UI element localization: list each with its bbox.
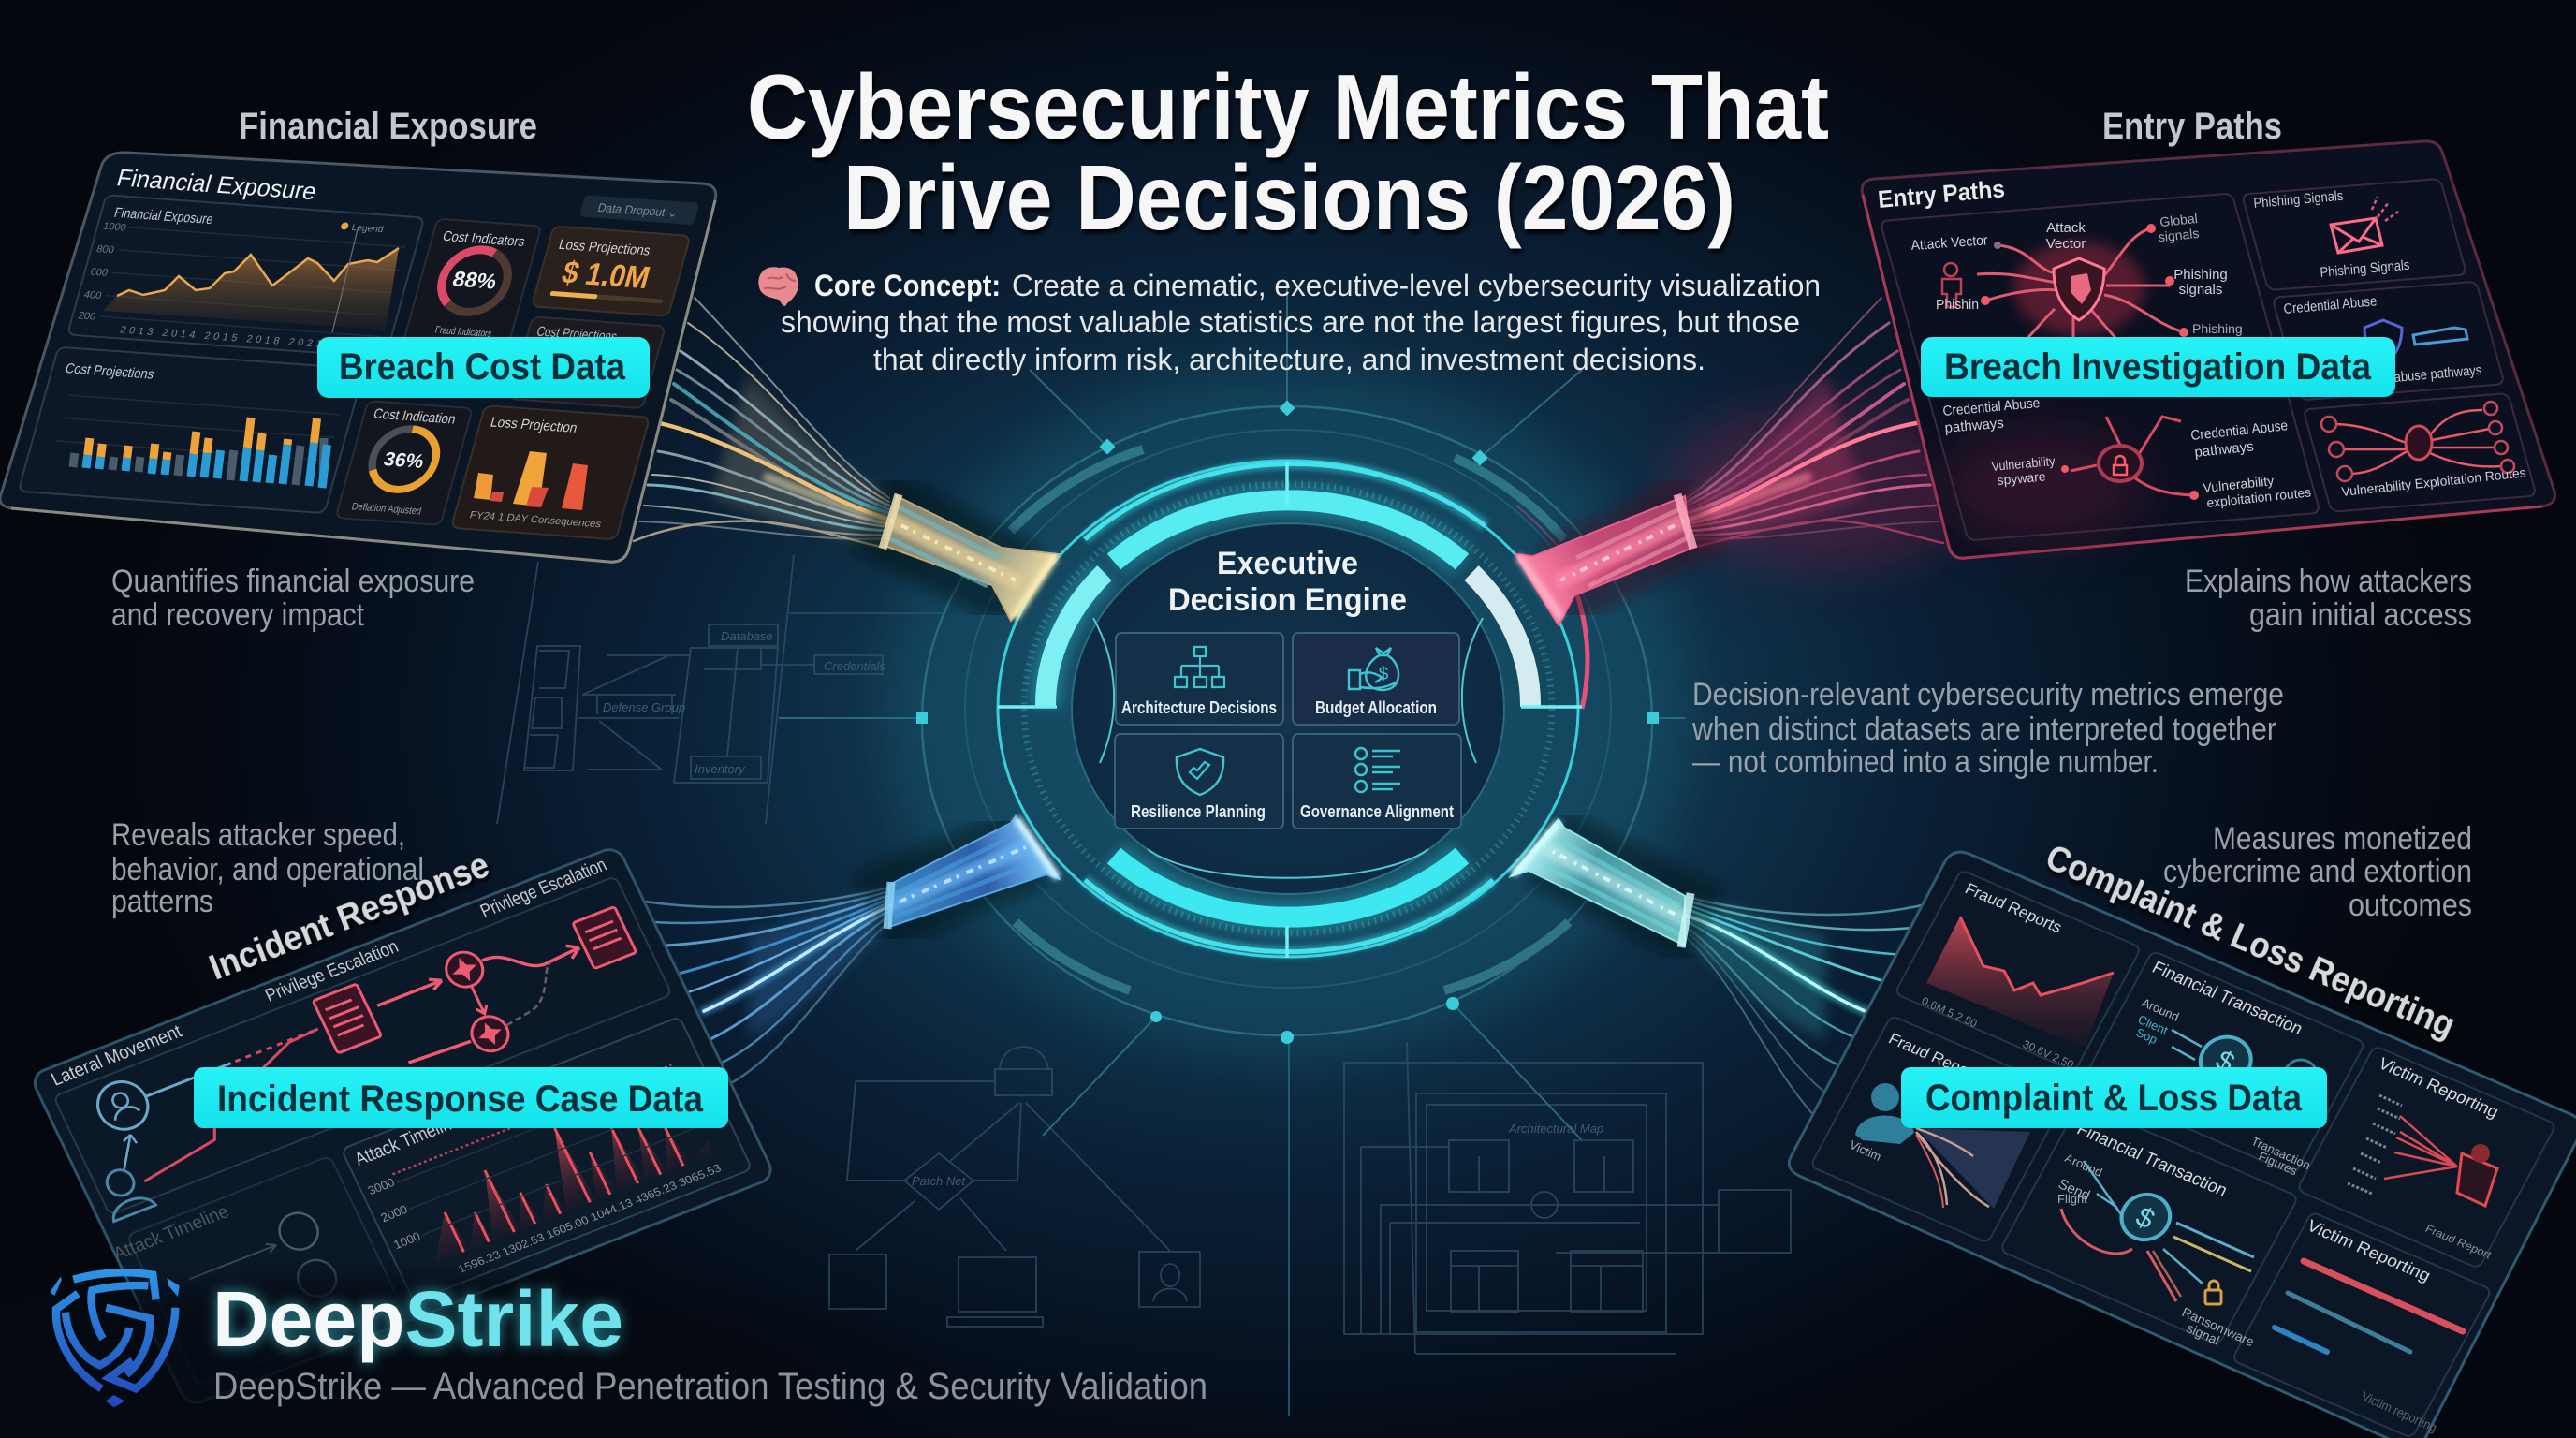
panel: financial exposure dashboard: 600: [89, 267, 110, 279]
lower attack path diagram: Credential Abuse: [2190, 418, 2289, 444]
panel: complaint and loss dashboard: Victim Reporting: [2304, 1216, 2434, 1285]
bottom network wireframe: [829, 1047, 1200, 1327]
data fibers: financial exposure: [634, 298, 889, 548]
architecture wireframe: Architectural Map: [1508, 1122, 1603, 1136]
fraud area chart: [1920, 917, 2114, 1071]
section heading: incident response: Incident Response: [204, 845, 494, 988]
icon: deepstrike shield: [50, 1272, 180, 1407]
credential abuse card: [2283, 293, 2482, 386]
hub rings: [922, 406, 1652, 1035]
data fibers: incident response: [645, 885, 889, 1083]
transaction flow bottom: signal: [2185, 1320, 2222, 1348]
core concept text: that directly inform risk, architecture, and investment decisions.: [873, 343, 1705, 376]
panel: incident response diagram: 2000: [378, 1202, 410, 1225]
caption: complaint and loss: Measures monetized: [2213, 821, 2472, 857]
panel: complaint and loss dashboard: Victim Reporting: [2376, 1054, 2502, 1122]
caption: entry paths: gain initial access: [2249, 597, 2472, 633]
lower attack path diagram: spyware: [1997, 468, 2046, 488]
panel: incident response diagram: Attack Timeline: [352, 1111, 463, 1170]
panel: complaint and loss dashboard: $: [2211, 1045, 2240, 1078]
panel: entry paths diagram: [1862, 141, 2555, 558]
left blueprint wireframe: [497, 555, 944, 824]
panel: financial exposure dashboard: $ 1.0M: [558, 256, 653, 296]
panel: financial exposure dashboard: [0, 153, 716, 562]
card: budget allocation: $: [1379, 665, 1389, 684]
caption: financial exposure: Quantifies financial exposure: [111, 564, 475, 599]
card: budget allocation: Budget Allocation: [1315, 698, 1437, 717]
connector pipe: entry paths: [1515, 494, 1705, 625]
panel: financial exposure dashboard: Fraud Indicators: [433, 325, 493, 340]
callout: complaint and loss data: Complaint & Loss Data: [1925, 1078, 2303, 1119]
panel: financial exposure dashboard: Cost Projections: [64, 360, 155, 383]
phishing signals card: Phishing Signals: [2253, 188, 2344, 212]
left blueprint wireframe: Database: [721, 629, 773, 643]
panel: financial exposure dashboard: Deflation Adjusted: [350, 501, 423, 517]
vulnerability routes card: [2321, 402, 2526, 499]
panel: incident response diagram: 1596.23 1302.53 1605.00 1044.13 4365.23 3065.53: [456, 1161, 724, 1276]
panel: complaint and loss dashboard: Fraud Report: [2423, 1222, 2495, 1262]
caption: interpretation note: — not combined into a single number.: [1692, 744, 2159, 780]
panel: incident response diagram: Lateral Movement: [48, 1021, 185, 1090]
title: Cybersecurity Metrics That: [747, 55, 1829, 158]
transaction flow top: Transaction: [2249, 1134, 2312, 1172]
attack vector hub: signals: [2158, 226, 2200, 244]
caption: interpretation note: when distinct datasets are interpreted together: [1691, 712, 2276, 747]
left blueprint wireframe: Credentials: [824, 659, 886, 673]
logo backdrop: [0, 1259, 973, 1438]
caption: interpretation note: [1691, 677, 2284, 780]
panel: financial exposure dashboard: 2013 2014 2015 2018 2021 2024: [119, 325, 365, 353]
caption: incident response: Reveals attacker speed,: [111, 817, 405, 853]
card: architecture decisions: [1116, 633, 1283, 725]
heading inside panel: Entry Paths: [1877, 174, 2006, 213]
panel: incident response diagram: Attack Timeline: [110, 1201, 232, 1265]
victim flow: Victim: [1848, 1137, 1883, 1164]
caption: financial exposure: [111, 564, 475, 633]
panel: incident response diagram: [29, 845, 775, 1407]
panel: financial exposure dashboard: 400: [82, 289, 103, 301]
caption: incident response: patterns: [111, 884, 213, 919]
lower attack path diagram: Vulnerability: [2203, 473, 2275, 495]
panel: financial exposure dashboard: Legend: [350, 223, 385, 235]
card: budget allocation: [1293, 633, 1459, 725]
fraud area chart: 30.6V 2.50: [2021, 1037, 2076, 1071]
caption: complaint and loss: [2163, 821, 2472, 923]
section heading: complaint and loss reporting: Complaint & Loss Reporting: [2040, 838, 2461, 1046]
victim reporting bars: Victim reporting: [2360, 1388, 2439, 1435]
architecture wireframe: [1344, 1042, 1791, 1354]
attack vector hub: Phishing: [2174, 267, 2228, 283]
callout: breach investigation data: [1921, 337, 2395, 397]
caption: interpretation note: Decision-relevant cybersecurity metrics emerge: [1692, 677, 2284, 712]
caption: incident response: behavior, and operational: [111, 852, 424, 888]
panel: financial exposure dashboard: Cost Indicators: [441, 228, 527, 250]
transaction flow bottom: Flight: [2057, 1192, 2087, 1206]
attack vector hub: Global: [2159, 211, 2198, 229]
lower attack path diagram: Vulnerability: [1991, 453, 2056, 474]
attack vector hub: Phishing: [2192, 321, 2243, 336]
victim reporting fan: [2348, 1095, 2497, 1206]
attack vector hub: Attack Vector: [1910, 232, 1988, 254]
panel: financial exposure dashboard: Loss Projections: [557, 237, 652, 259]
logo wordmark: DeepStrike: [212, 1275, 623, 1363]
transaction flow bottom: Ransomware: [2180, 1304, 2257, 1349]
transaction flow bottom: Around: [2063, 1151, 2104, 1180]
core concept text: Create a cinematic, executive-level cybersecurity visualization: [1012, 269, 1821, 302]
maroon glow around entry fibers: [1666, 403, 1984, 571]
data fibers: complaint and loss: [1687, 896, 1930, 1119]
lower attack path diagram: [1942, 395, 2312, 510]
panel: incident response diagram: 1000: [391, 1229, 423, 1252]
victim flow: [1848, 1083, 2030, 1209]
lower attack path diagram: pathways: [2194, 438, 2254, 461]
panel: incident response diagram: 3000: [366, 1175, 397, 1197]
panel: financial exposure dashboard: Data Dropout ⌄: [596, 200, 680, 220]
line chart: financial exposure: [103, 229, 399, 332]
panel: complaint and loss dashboard: Financial Transaction: [2073, 1120, 2231, 1201]
transaction flow bottom: [2056, 1151, 2257, 1349]
stacked bar chart: cost projections: [73, 418, 328, 488]
connector pipe: incident response: [871, 816, 1060, 929]
panel: incident response diagram: Privilege Escalation: [262, 936, 402, 1006]
panel: financial exposure dashboard: FY24 1 DAY Consequences: [468, 510, 603, 530]
bar chart: loss projection: [474, 451, 588, 510]
caption: incident response: [111, 817, 424, 919]
callout: breach cost data: Breach Cost Data: [339, 346, 626, 388]
hub heading: Decision Engine: [1168, 582, 1407, 618]
data fibers: entry paths: [1687, 298, 1943, 548]
panel: financial exposure dashboard: 200: [77, 311, 97, 323]
panel: financial exposure dashboard: Loss Projection: [489, 415, 579, 436]
lower attack path diagram: exploitation routes: [2206, 484, 2312, 510]
caption: entry paths: [2185, 564, 2472, 633]
left blueprint wireframe: Inventory: [695, 762, 746, 776]
card: resilience planning: [1115, 734, 1283, 829]
credential abuse card: Credential Abuse: [2283, 293, 2378, 317]
panel: financial exposure dashboard: Financial Exposure: [114, 164, 320, 205]
callout: incident response case data: [194, 1067, 728, 1128]
hub thick band arcs: [1046, 500, 1530, 917]
ambient glow behind hub: [886, 365, 1690, 1058]
panel: incident response diagram: Privilege Escalation: [477, 855, 610, 922]
panel: financial exposure dashboard: 88%: [450, 267, 500, 293]
phishing signals card: [2253, 188, 2410, 281]
section heading: entry paths: Entry Paths: [2102, 106, 2282, 147]
lower attack path diagram: pathways: [1944, 416, 2004, 436]
panel: complaint and loss dashboard: Financial Transaction: [2149, 958, 2305, 1039]
transaction flow bottom: Send: [2056, 1176, 2092, 1204]
caption: entry paths: Explains how attackers: [2185, 564, 2472, 599]
panel: complaint and loss dashboard: Fraud Reports: [1885, 1030, 1988, 1086]
attack vector hub: Phishin: [1936, 297, 1979, 313]
attack vector hub: [1910, 211, 2243, 351]
attack vector hub: Vector: [2046, 236, 2086, 252]
caption: complaint and loss: outcomes: [2349, 888, 2472, 923]
panel: financial exposure dashboard: 36%: [381, 448, 427, 473]
callout: breach investigation data: Breach Investigation Data: [1944, 346, 2372, 388]
card: governance alignment: [1293, 734, 1461, 829]
hub nodes and spokes: [779, 281, 1685, 1416]
vulnerability routes card: Vulnerability Exploitation Routes: [2341, 464, 2526, 499]
panel: financial exposure dashboard: 1000: [102, 221, 127, 233]
panel: financial exposure dashboard: Financial Exposure: [112, 205, 215, 227]
caption: complaint and loss: cybercrime and extortion: [2163, 854, 2472, 889]
core concept text: showing that the most valuable statistics are not the largest figures, but those: [781, 305, 1800, 339]
panel: financial exposure dashboard: 800: [95, 243, 115, 256]
transaction flow top: Figures: [2257, 1149, 2300, 1179]
transaction flow top: Client: [2136, 1012, 2171, 1037]
panel: financial exposure dashboard: Cost Indication: [372, 406, 458, 428]
callout: incident response case data: Incident Response Case Data: [217, 1078, 704, 1120]
section heading: financial exposure: Financial Exposure: [239, 106, 537, 147]
attack vector hub: signals: [2179, 282, 2222, 298]
transaction flow top: Sop: [2134, 1025, 2159, 1047]
icon: brain: [758, 267, 798, 306]
hub heading: Executive: [1217, 546, 1358, 581]
core concept text: [781, 269, 1821, 376]
card: architecture decisions: Architecture Decisions: [1121, 698, 1277, 717]
transaction flow top: [2134, 995, 2318, 1179]
victim reporting bars: [2275, 1261, 2463, 1435]
hub heading: [1168, 546, 1407, 618]
tagline: DeepStrike — Advanced Penetration Testing & Security Validation: [213, 1366, 1208, 1407]
transaction flow top: Around: [2140, 995, 2181, 1024]
connector pipe: complaint and loss: [1511, 819, 1705, 947]
title: [747, 55, 1829, 249]
left blueprint wireframe: Defense Group: [603, 700, 685, 714]
card: resilience planning: Resilience Planning: [1131, 802, 1266, 821]
panel: complaint and loss dashboard: Fraud Reports: [1962, 880, 2065, 936]
credential abuse card: abuse pathways: [2393, 362, 2482, 386]
connector pipe: financial: [871, 494, 1059, 621]
phishing signals card: Phishing Signals: [2320, 257, 2410, 281]
caption: financial exposure: and recovery impact: [111, 597, 364, 633]
card: governance alignment: Governance Alignment: [1300, 802, 1454, 821]
callout: complaint and loss data: [1901, 1067, 2327, 1128]
bottom network wireframe: Patch Net: [912, 1174, 966, 1188]
panel: financial exposure dashboard: Cost Projections: [534, 324, 619, 345]
attack vector hub: Attack: [2046, 220, 2086, 236]
panel: complaint and loss dashboard: [1789, 852, 2576, 1438]
core concept text: Core Concept:: [814, 269, 1001, 302]
fraud area chart: 0.6M 5.2 50: [1920, 994, 1980, 1031]
lower attack path diagram: Credential Abuse: [1942, 395, 2041, 419]
title: Drive Decisions (2026): [843, 146, 1735, 249]
panel: complaint and loss dashboard: $: [2130, 1201, 2159, 1235]
callout: breach cost data: [317, 337, 650, 398]
